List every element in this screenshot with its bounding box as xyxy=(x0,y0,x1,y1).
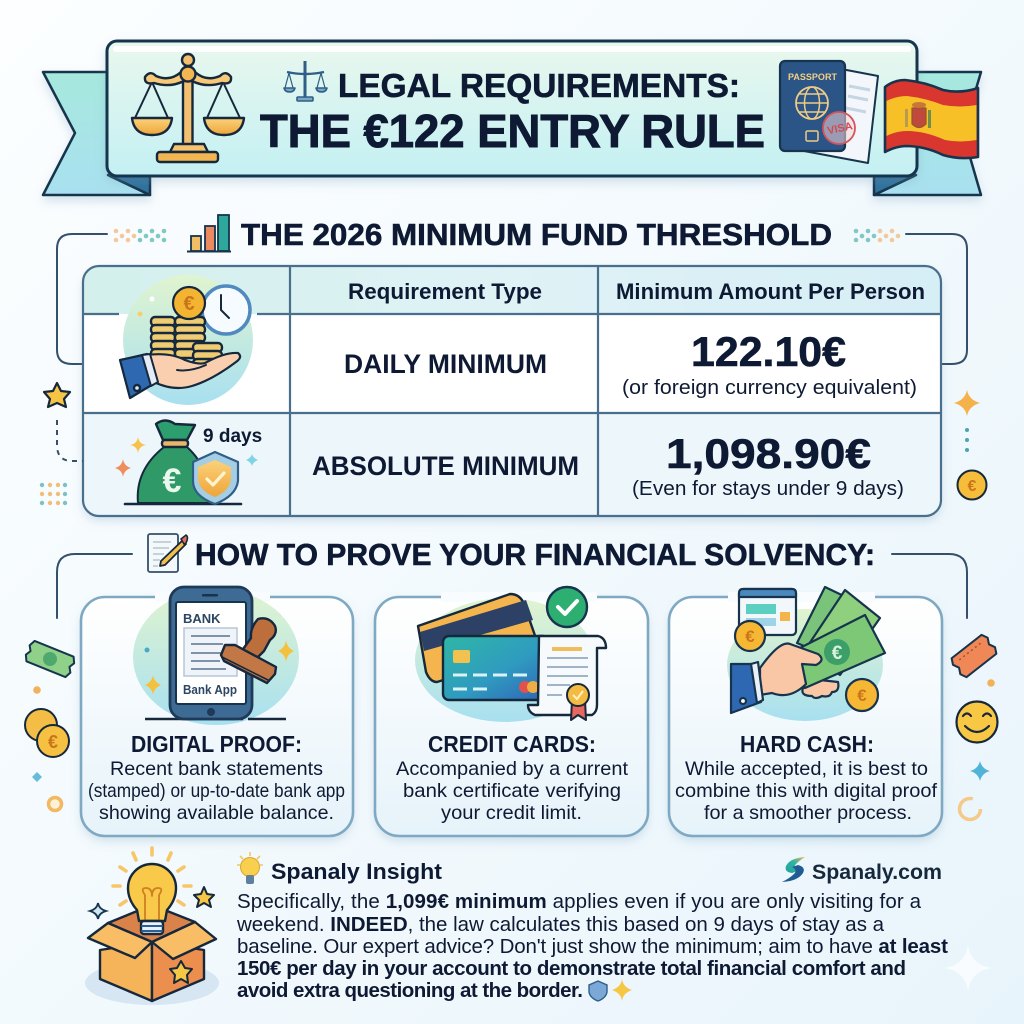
icon: gold star xyxy=(44,383,70,407)
label: 9 days: 9 days xyxy=(203,426,262,447)
icon: light bulb in open box xyxy=(85,848,219,1005)
icon: small shield xyxy=(589,981,607,1001)
note: daily minimum: (or foreign currency equivalent) xyxy=(622,376,917,399)
panel: digital proof xyxy=(81,587,353,836)
decorations: left of table xyxy=(40,383,83,505)
card frame xyxy=(375,597,648,836)
icon: coins in hand with clock: € xyxy=(183,293,195,315)
icon: credit cards with certificate xyxy=(415,587,606,722)
decoration: dotted pattern right xyxy=(854,229,900,242)
decoration: dot grid xyxy=(40,483,67,505)
icon: orange sparkle xyxy=(954,390,980,416)
icon: coins in hand with clock xyxy=(120,275,253,405)
icon: stacked euro coins xyxy=(25,709,69,757)
insight body text: Specifically, the 1,099€ minimum applies even if you are only visiting for a xyxy=(237,890,922,913)
panel: hard cash xyxy=(669,587,942,836)
insight body text: weekend. INDEED, the law calculates this based on 9 days of stay as a xyxy=(236,913,885,936)
decorations: right of cards xyxy=(949,633,999,820)
icon: passport and visa paper xyxy=(780,61,878,163)
decoration: teal dots xyxy=(965,428,969,452)
icon: stacked euro coins: € xyxy=(48,732,58,752)
insight body text: 150€ per day in your account to demonstrate total financial comfort and xyxy=(237,957,906,980)
banner plate xyxy=(107,41,917,176)
icon: blue sparkle xyxy=(970,761,990,781)
card body text: for a smoother process. xyxy=(704,802,912,824)
icon: bank app with stamp: Bank App xyxy=(183,682,237,697)
logo: Spanaly.com: Spanaly.com xyxy=(812,861,942,884)
icon: small bulb xyxy=(237,852,263,884)
column header: minimum amount: Minimum Amount Per Person xyxy=(616,279,925,304)
decoration: orange dot xyxy=(987,679,995,687)
icon: hand holding euro notes: € xyxy=(857,686,867,705)
card frame xyxy=(81,597,353,836)
icon: money bag with shield xyxy=(115,420,258,504)
card heading: HARD CASH: xyxy=(740,731,874,757)
connector: left bracket xyxy=(57,554,132,618)
value: absolute minimum: 1,098.90€ xyxy=(666,430,871,477)
row label: daily minimum: DAILY MINIMUM xyxy=(344,349,547,379)
icon: small blue scales xyxy=(284,61,327,101)
connector: left bracket xyxy=(57,234,107,364)
panel: credit cards xyxy=(375,587,648,836)
right ribbon tail xyxy=(874,72,981,195)
connector: dashed line to table xyxy=(57,420,83,461)
note: absolute minimum: (Even for stays under 9 days) xyxy=(632,477,904,500)
icon: bar chart xyxy=(187,215,231,252)
icon: passport and visa paper: PASSPORT xyxy=(788,72,837,83)
icon: hand holding euro notes xyxy=(727,587,885,721)
icon: smiley xyxy=(956,702,998,742)
decorations: right of table xyxy=(954,390,986,500)
decoration: dotted pattern left xyxy=(114,229,166,242)
card body text: showing available balance. xyxy=(99,802,334,824)
icon: sparkles xyxy=(612,979,632,1001)
logo: Spanaly.com xyxy=(782,857,942,884)
section title: THE 2026 MINIMUM FUND THRESHOLD xyxy=(241,217,832,252)
card body text xyxy=(396,758,629,824)
icon: Spanish flag xyxy=(885,80,978,158)
row label: absolute minimum: ABSOLUTE MINIMUM xyxy=(312,451,579,481)
card body text: bank certificate verifying xyxy=(403,780,621,802)
icon: bank app with stamp: BANK xyxy=(183,611,221,626)
title banner xyxy=(43,41,981,195)
decorations: left of cards xyxy=(24,640,76,810)
banner inner highlight xyxy=(113,46,911,52)
table grid xyxy=(83,266,941,516)
icon: document and pencil xyxy=(148,534,188,572)
icon: green banknote xyxy=(24,640,76,678)
card body text: Accompanied by a current xyxy=(396,758,629,780)
card body text: combine this with digital proof xyxy=(675,780,938,802)
card body text: Recent bank statements xyxy=(110,758,323,780)
card body text: (stamped) or up-to-date bank app xyxy=(88,780,345,802)
table header band xyxy=(83,266,941,314)
white gap in card border behind icon xyxy=(441,592,597,602)
table: fund thresholds xyxy=(83,266,941,516)
icon: money bag with shield: € xyxy=(163,462,182,500)
decoration: gold ring xyxy=(48,798,62,810)
icon: passport and visa paper: VISA xyxy=(826,120,854,137)
card heading: DIGITAL PROOF: xyxy=(131,731,302,757)
connector: right bracket xyxy=(906,234,967,364)
panel: Spanaly insight xyxy=(85,848,992,1005)
icon: large gold scales xyxy=(132,54,244,162)
card heading: CREDIT CARDS: xyxy=(428,731,596,757)
decoration: gold ring xyxy=(960,798,980,820)
column header: requirement type: Requirement Type xyxy=(348,279,542,304)
insight title: Spanaly Insight xyxy=(271,859,443,884)
value: daily minimum: 122.10€ xyxy=(691,328,846,375)
decoration: faint sparkle xyxy=(944,945,992,991)
heading line 2: THE €122 ENTRY RULE xyxy=(260,105,765,157)
white gap in card border behind icon xyxy=(728,592,875,602)
card body text xyxy=(675,758,938,824)
card body text: your credit limit. xyxy=(441,802,582,824)
heading line 1: LEGAL REQUIREMENTS: xyxy=(338,67,740,104)
icon: euro coin: € xyxy=(968,478,977,495)
section title: HOW TO PROVE YOUR FINANCIAL SOLVENCY: xyxy=(195,537,875,572)
icon: orange ticket xyxy=(949,633,999,679)
card frame xyxy=(669,597,942,836)
icon: bank app with stamp xyxy=(133,587,299,725)
table background xyxy=(83,266,941,516)
left ribbon tail xyxy=(43,72,150,195)
insight body text: avoid extra questioning at the border. xyxy=(237,979,583,1002)
card body text: While accepted, it is best to xyxy=(685,758,928,780)
section heading: minimum fund threshold xyxy=(57,215,967,364)
insight body text: baseline. Our expert advice? Don't just show the minimum; aim to have at least xyxy=(237,935,948,958)
section heading: financial solvency xyxy=(57,534,967,618)
table shaded row xyxy=(83,413,941,516)
decoration: orange dot xyxy=(33,686,41,694)
icon: hand holding euro notes: € xyxy=(832,643,843,664)
white gap in card border behind icon xyxy=(155,592,270,602)
connector: right bracket xyxy=(892,554,967,618)
insight body text xyxy=(236,890,948,1002)
card body text xyxy=(88,758,345,824)
icon: hand holding euro notes: € xyxy=(745,627,755,646)
decoration: blue diamond xyxy=(32,772,42,782)
